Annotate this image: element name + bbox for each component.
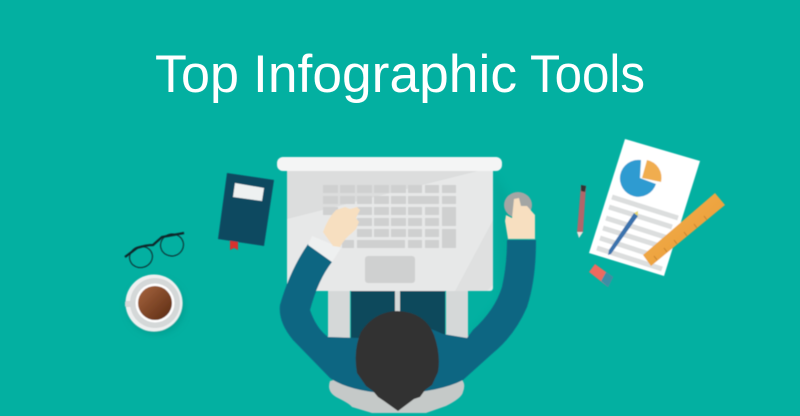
blue pencil [608, 213, 638, 255]
notebook label [233, 183, 264, 201]
trackpad [365, 256, 415, 283]
title: Infographic [253, 45, 517, 104]
head [356, 311, 439, 411]
desk legs, light [328, 290, 350, 338]
right hand [505, 198, 535, 239]
chair [329, 365, 464, 413]
person and laptop illustration [277, 157, 536, 413]
left hand [323, 207, 360, 247]
laptop hinge bar [277, 157, 502, 171]
left shirt cuff [308, 236, 341, 262]
laptop shadow [470, 171, 530, 335]
keyboard [323, 185, 456, 248]
ruler [643, 193, 725, 266]
icon: glasses [125, 231, 186, 270]
icon: eraser [589, 264, 613, 287]
mouse [504, 192, 532, 218]
pie chart [620, 160, 662, 197]
icon: notebook [218, 173, 274, 250]
title [155, 45, 645, 104]
arms and torso [280, 240, 536, 394]
icon: document with pie chart [589, 139, 725, 276]
bookmark [230, 240, 238, 250]
title: Tools [530, 45, 645, 104]
icon: pen [577, 185, 586, 238]
text lines [597, 197, 678, 269]
desk legs, dark [351, 291, 395, 341]
laptop body [287, 168, 493, 291]
icon: coffee cup [125, 274, 184, 334]
title: Top [155, 45, 239, 104]
